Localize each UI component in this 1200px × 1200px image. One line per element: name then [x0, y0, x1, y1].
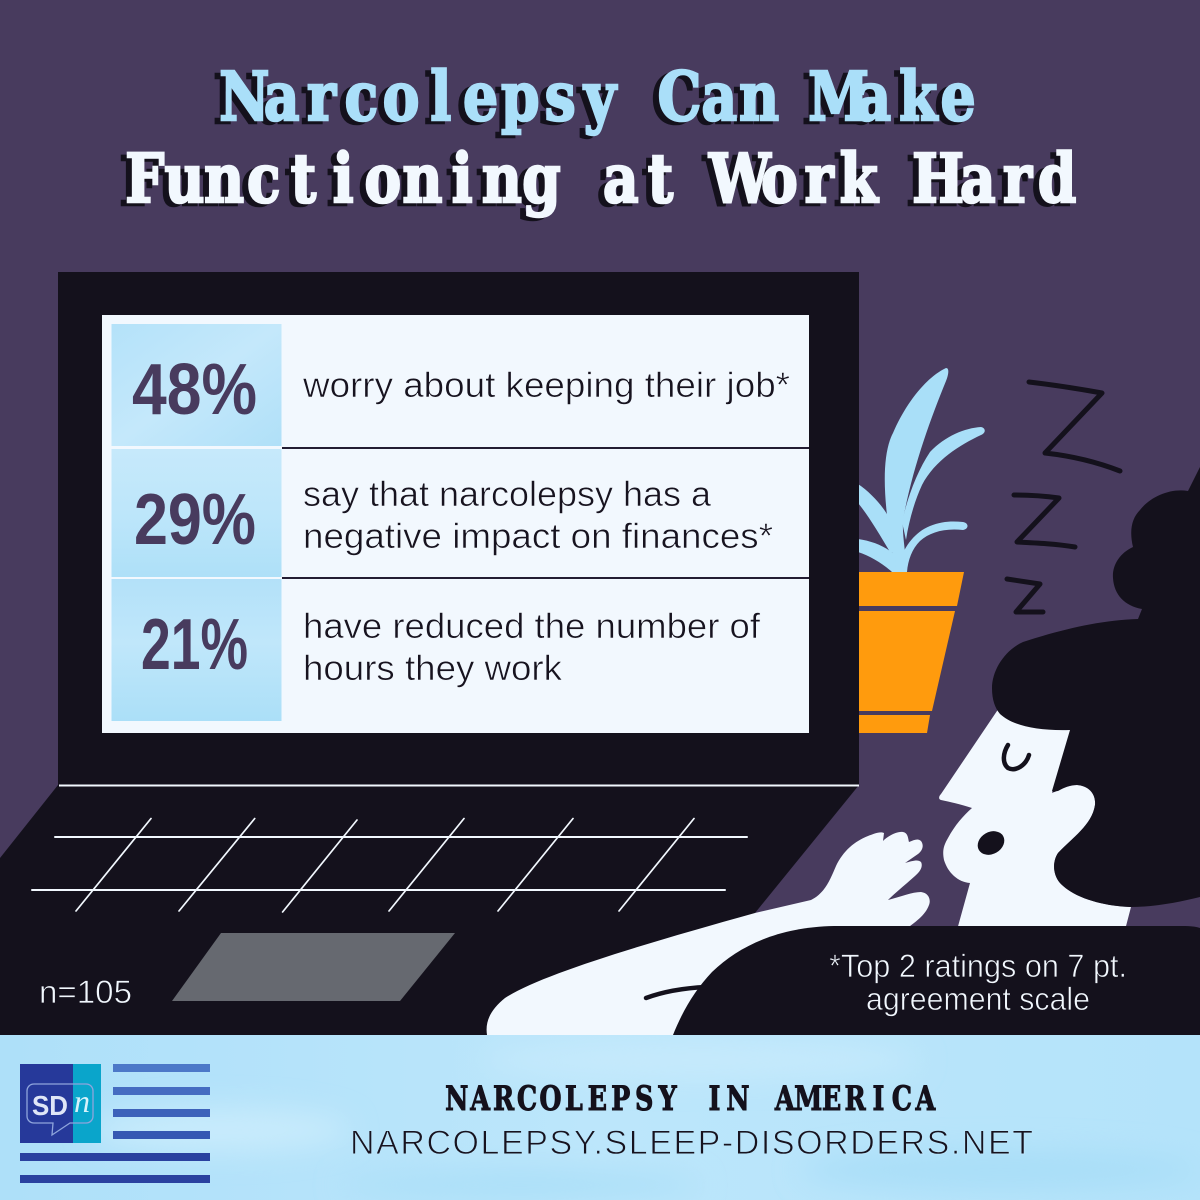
keyboard lines: [32, 818, 747, 912]
plant leaves: [858, 368, 985, 572]
title: [119, 58, 1076, 221]
row: 29 percent: 29%: [134, 480, 256, 560]
plant pot: [859, 572, 964, 733]
panel: statistics screen: [102, 315, 809, 733]
footer url: NARCOLEPSY.SLEEP-DISORDERS.NET: [350, 1124, 1033, 1162]
title line 2: Functioning at Work Hard: [119, 143, 1070, 221]
logo letter n: n: [74, 1083, 90, 1119]
closed eye: [1004, 745, 1029, 769]
sample size note: n=105: [39, 974, 132, 1010]
body and shoulder: [673, 926, 1200, 1035]
row: 48 percent: 48%: [132, 350, 257, 430]
icon: potted plant: [858, 368, 985, 733]
logo speech bubble: [27, 1084, 93, 1135]
logo letters SD: SD: [32, 1090, 68, 1121]
footnote: [829, 948, 1127, 1017]
laptop screen bezel: [58, 272, 859, 785]
person head and neck: [939, 708, 1131, 930]
row: 21 percent: 21%: [141, 605, 248, 685]
title line 1: Narcolepsy Can Make: [213, 61, 970, 139]
footnote: agreement scale: [866, 981, 1090, 1017]
row: 21 percent: hours they work: [303, 649, 563, 688]
title line 2: Functioning at Work Hard: [125, 140, 1076, 218]
row: 21 percent: [112, 579, 760, 721]
row: 48 percent: [112, 324, 790, 446]
open mouth: [973, 826, 1009, 860]
person hair: [992, 467, 1200, 907]
row: 21 percent: have reduced the number of: [303, 607, 760, 646]
row: 29 percent: negative impact on finances*: [303, 517, 773, 556]
flag stripes long: [20, 1153, 210, 1183]
row divider 1: [282, 447, 809, 449]
logo: SDn flag: [20, 1064, 210, 1183]
arm and hand: [487, 832, 930, 1035]
trackpad: [172, 933, 455, 1001]
arm crease: [646, 987, 706, 998]
icon: sleeping Z letters: [1007, 382, 1120, 612]
footnote: *Top 2 ratings on 7 pt.: [829, 948, 1127, 984]
illustration: sleeping person: [487, 467, 1200, 1035]
row: 29 percent: say that narcolepsy has a: [303, 475, 712, 514]
logo square: [20, 1064, 73, 1143]
flag stripes short: [113, 1064, 210, 1139]
screen background: [102, 315, 809, 733]
row: 48 percent: worry about keeping their job*: [302, 366, 790, 405]
title line 1: Narcolepsy Can Make: [219, 58, 976, 136]
footer band: [0, 1035, 1200, 1200]
row: 29 percent: [112, 449, 773, 577]
row divider 2: [282, 577, 809, 579]
hinge line: [59, 784, 859, 786]
laptop: [0, 272, 859, 1035]
footer heading: NARCOLEPSY IN AMERICA: [445, 1079, 936, 1119]
laptop base: [0, 785, 859, 1035]
